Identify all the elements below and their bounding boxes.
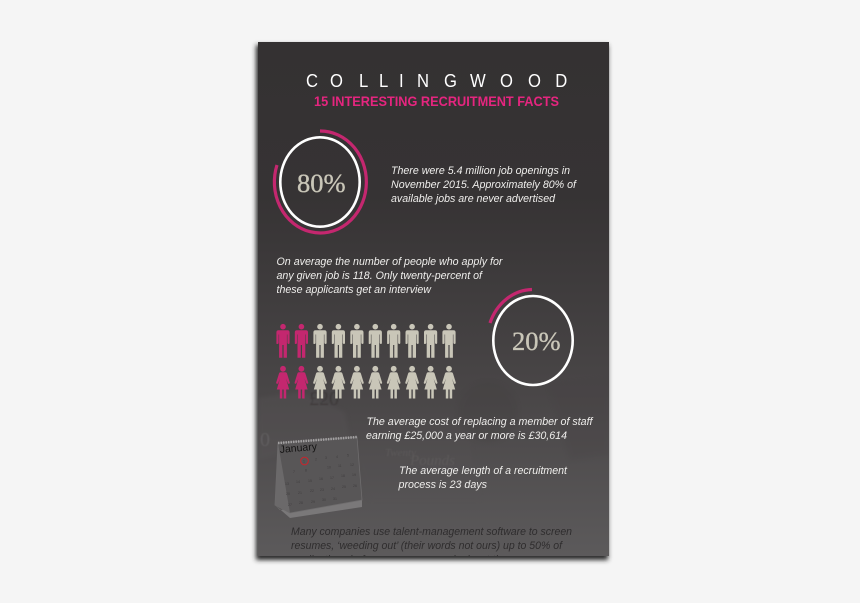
- icon row: men, two of ten highlighted: [276, 324, 456, 358]
- text: talent-management software fact, cut off by panel edge: [291, 527, 572, 556]
- text: talent-management software fact, cut off by panel edge: resumes, ‘weeding out’ (their words not ours) up to 50% of: [291, 540, 564, 552]
- text: job openings fact: There were 5.4 million job openings in: [391, 165, 570, 177]
- logo: Collingwood: COLLINGWOOD: [306, 70, 567, 91]
- icon: desk calendar: 21: [298, 491, 302, 495]
- icon: desk calendar: 2: [315, 458, 317, 462]
- chart: 20% ring: [490, 290, 573, 385]
- text: job openings fact: available jobs are never advertised: [391, 193, 556, 205]
- icon: desk calendar: 15: [308, 479, 312, 483]
- text: recruitment length fact: process is 23 days: [398, 479, 487, 491]
- icon row: women, two of ten highlighted: [276, 366, 456, 398]
- text: recruitment length fact: The average length of a recruitment: [399, 465, 568, 477]
- chart: 80% ring: 80%: [297, 168, 346, 198]
- icon: desk calendar: 14: [296, 480, 300, 484]
- icon: desk calendar: 31: [333, 497, 337, 501]
- text: applicants fact: any given job is 118. Only twenty-percent of: [276, 270, 484, 282]
- icon: desk calendar: 24: [331, 487, 335, 491]
- icon: desk calendar: 3: [325, 456, 327, 460]
- background: faded banknotes: £20: [309, 388, 339, 410]
- background: faded banknotes: [260, 392, 448, 462]
- heading: 15 interesting recruitment facts: 15 INTERESTING RECRUITMENT FACTS: [314, 93, 559, 109]
- icon: desk calendar: 25: [342, 485, 346, 489]
- icon: desk calendar: 23: [320, 488, 324, 492]
- icon: desk calendar: 11: [338, 464, 342, 468]
- panel: dark poster background: [258, 42, 609, 556]
- text: talent-management software fact, cut off by panel edge: applications before a person even looks at them: [291, 554, 516, 566]
- panel shadow: [256, 45, 608, 560]
- chart: 80% ring: [274, 131, 366, 233]
- icon: desk calendar: 30: [322, 498, 326, 502]
- text: talent-management software fact, cut off by panel edge: Many companies use talent-management software to screen: [291, 526, 572, 538]
- icon: desk calendar: 10: [327, 466, 331, 470]
- icon: desk calendar: January: [279, 441, 318, 456]
- text: replacement cost fact: The average cost of replacing a member of staff: [366, 416, 594, 428]
- icon: desk calendar: 28: [299, 501, 303, 505]
- icon: desk calendar: 17: [330, 476, 334, 480]
- icon: desk calendar: 13: [285, 482, 289, 486]
- text: applicants fact: On average the number of people who apply for: [276, 256, 504, 268]
- text: applicants fact: [276, 256, 504, 296]
- icon: desk calendar: [275, 437, 362, 518]
- text: job openings fact: [391, 165, 578, 205]
- icon: desk calendar: 8: [305, 468, 307, 472]
- text: replacement cost fact: [366, 416, 594, 442]
- icon: desk calendar: 26: [353, 484, 357, 488]
- background: faded banknotes: Pounds: [409, 453, 455, 469]
- background: faded banknotes: 0: [260, 429, 270, 451]
- text: job openings fact: November 2015. Approximately 80% of: [391, 179, 578, 191]
- icon: desk calendar: 4: [336, 455, 338, 459]
- icon: desk calendar: 19: [352, 473, 356, 477]
- chart: 20% ring: 20%: [512, 326, 561, 356]
- icon: desk calendar: 7: [293, 470, 295, 474]
- icon: desk calendar: 18: [341, 474, 345, 478]
- background: faded banknotes: Twenty: [385, 447, 416, 459]
- icon: desk calendar: 1: [303, 460, 305, 464]
- icon: desk calendar: 12: [350, 463, 354, 467]
- icon: desk calendar: 22: [310, 489, 314, 493]
- icon: desk calendar: 5: [347, 454, 349, 458]
- icon: desk calendar: 29: [311, 500, 315, 504]
- text: applicants fact: these applicants get an interview: [276, 284, 432, 296]
- icon: desk calendar: 20: [286, 492, 290, 496]
- icon: desk calendar: 16: [319, 477, 323, 481]
- text: replacement cost fact: earning £25,000 a year or more is £30,614: [366, 430, 567, 442]
- text: recruitment length fact: [398, 465, 568, 491]
- icon: desk calendar: 27: [288, 503, 292, 507]
